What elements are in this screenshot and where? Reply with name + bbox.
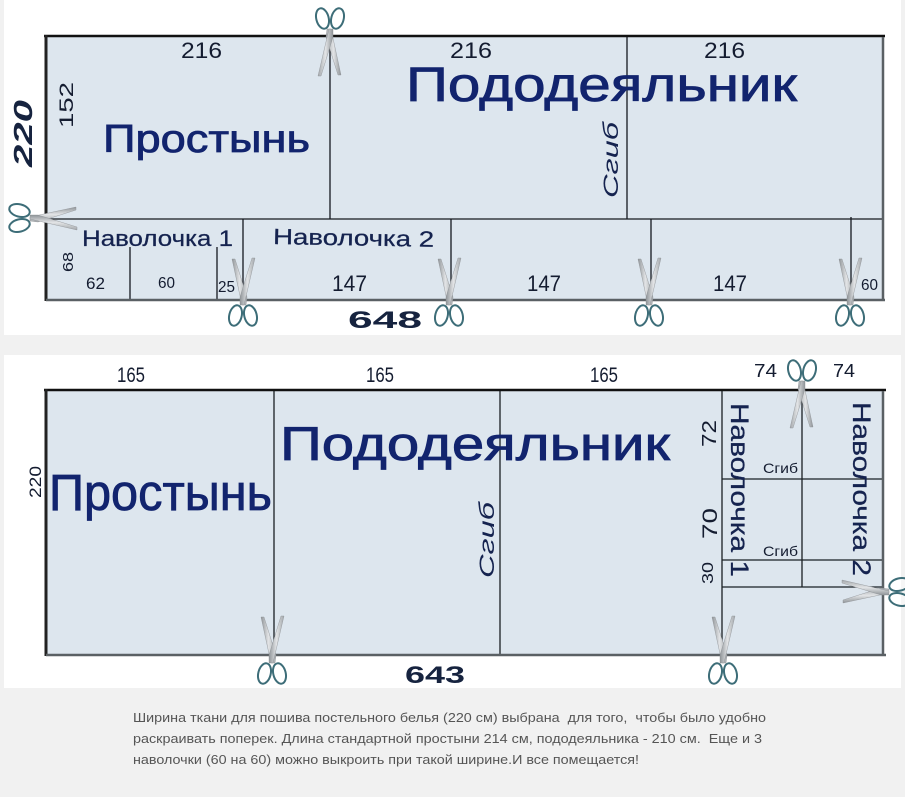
icon: scissors right: [842, 576, 905, 608]
dimensions top: 147: [713, 271, 747, 296]
fabric width 220: 220: [8, 99, 38, 169]
label: pillowcase 1 vertical: Наволочка 1: [725, 403, 753, 577]
dimensions top: 25: [218, 279, 235, 296]
fold label top: Сгиб: [600, 120, 623, 198]
total length 648: 648: [348, 307, 422, 334]
fabric sheet bottom: [47, 391, 883, 655]
icon: scissors bottom 2: [707, 616, 739, 685]
icon: scissors top: [314, 7, 346, 76]
frame top: [44, 35, 885, 301]
dimensions bottom: 72: [699, 420, 721, 447]
dimensions top: 216: [704, 38, 745, 63]
label: sheet: Простынь: [49, 464, 272, 521]
label: pillowcase 1: Наволочка 1: [82, 226, 233, 251]
icon: scissors bottom 4: [834, 258, 866, 327]
dimensions bottom: Сгиб: [763, 460, 798, 476]
dimensions top: 152: [57, 82, 78, 128]
dimensions bottom: 165: [590, 364, 618, 387]
caption text: [133, 711, 766, 767]
panel: bottom layout (643 cm): [4, 355, 905, 689]
fold label bottom: Сгиб: [476, 500, 499, 578]
cut lines top: [47, 37, 883, 300]
icon: scissors bottom 1: [256, 616, 288, 685]
dimensions top: 216: [450, 38, 492, 63]
dimensions top: 68: [60, 252, 77, 272]
caption text: раскраивать поперек. Длина стандартной простыни 214 см, пододеяльника - 210 см. Еще и 3: [133, 732, 762, 746]
dimensions top: 147: [332, 271, 367, 296]
icon: scissors bottom 1: [227, 258, 259, 327]
label: pillowcase 2: Наволочка 2: [273, 224, 434, 252]
label: duvet cover: Пододеяльник: [406, 59, 798, 112]
total length 643: 643: [405, 662, 465, 689]
label: pillowcase 2 vertical: Наволочка 2: [847, 402, 875, 576]
icon: scissors top: [786, 359, 818, 428]
dimensions top: 62: [86, 274, 105, 293]
icon: scissors left: [8, 202, 77, 234]
cut lines bottom: [274, 391, 883, 655]
dimensions bottom: 74: [754, 361, 777, 381]
fabric sheet top: [47, 37, 883, 300]
panel: top layout (648 cm): [4, 0, 901, 335]
dimensions bottom: Сгиб: [763, 543, 798, 559]
dimensions bottom: 165: [117, 364, 145, 387]
label: sheet: Простынь: [103, 118, 310, 161]
dimensions top: 216: [181, 38, 222, 63]
dimensions bottom: [26, 361, 855, 584]
dimensions top: 147: [527, 271, 561, 296]
dimensions bottom: 165: [366, 364, 394, 387]
dimensions bottom: 70: [699, 508, 722, 539]
caption text: наволочки (60 на 60) можно выкроить при такой ширине.И все помещается!: [133, 753, 639, 767]
dimensions bottom: 30: [700, 562, 717, 584]
caption text: Ширина ткани для пошива постельного белья (220 см) выбрана для того, чтобы было удобно: [133, 711, 766, 725]
dimensions top: [57, 38, 878, 296]
frame bottom: [44, 389, 886, 656]
dimensions bottom: 220: [26, 466, 45, 498]
icon: scissors bottom 2: [433, 258, 465, 327]
icon: scissors bottom 3: [633, 258, 665, 327]
label: duvet cover: Пододеяльник: [280, 417, 671, 470]
dimensions top: 60: [861, 277, 878, 294]
dimensions top: 60: [158, 275, 175, 292]
dimensions bottom: 74: [833, 361, 855, 381]
